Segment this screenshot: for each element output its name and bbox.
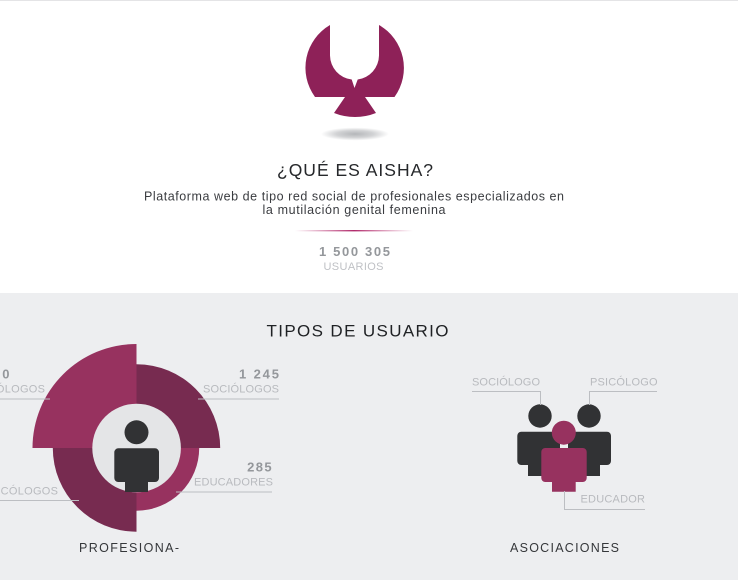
callout: top left stat: 0	[2, 367, 10, 382]
person: psicólogo	[568, 404, 611, 476]
callout: sociólogo: SOCIÓLOGO	[472, 376, 540, 388]
stat: total users: USUARIOS	[324, 261, 384, 273]
callout: bottom left stat	[0, 484, 79, 501]
callout: educadores stat	[176, 460, 273, 492]
callout: psicólogo	[590, 376, 658, 405]
callout: educador: EDUCADOR	[580, 494, 645, 506]
gradient rule	[295, 230, 413, 231]
segment: bottom right, educadores	[136, 448, 199, 511]
icon: group of three people	[517, 404, 611, 492]
centre circle	[92, 404, 181, 492]
callout: educador	[564, 491, 645, 510]
label: profesionales: PROFESIONA-	[79, 541, 179, 555]
logo shadow	[321, 128, 389, 140]
segment: top right, sociólogos	[136, 364, 220, 448]
panel: ¿qué es AISHA?	[144, 25, 568, 273]
description text: la mutilación genital femenina	[262, 203, 446, 217]
callout: sociólogos stat: 1 245	[239, 367, 279, 382]
callout: sociólogos stat: SOCIÓLOGOS	[203, 383, 279, 396]
icon: AISHA bird logo	[305, 25, 404, 117]
callout: psicólogo: PSICÓLOGO	[590, 376, 658, 388]
chart: profesionales radial	[32, 344, 220, 532]
icon: person	[114, 420, 159, 492]
heading: tipos de usuario: TIPOS DE USUARIO	[266, 322, 448, 341]
heading: ¿qué es AISHA?: ¿QUÉ ES AISHA?	[277, 160, 433, 180]
callout: educadores stat: EDUCADORES	[194, 477, 273, 489]
stat: total users	[319, 244, 390, 273]
label: asociaciones: ASOCIACIONES	[510, 541, 619, 555]
callout: educadores stat: 285	[247, 460, 273, 475]
description text: Plataforma web de tipo red social de profesionales especializados en	[144, 190, 564, 204]
segment: top left	[32, 344, 136, 448]
person: educador	[541, 421, 587, 492]
callout: sociólogo	[472, 376, 540, 405]
person: sociólogo	[517, 404, 560, 476]
segment: bottom left	[53, 448, 136, 532]
panel: tipos de usuario	[0, 293, 738, 580]
stat: total users: 1 500 305	[319, 244, 390, 259]
callout: top left stat	[0, 367, 50, 400]
callout: sociólogos stat	[198, 367, 279, 400]
